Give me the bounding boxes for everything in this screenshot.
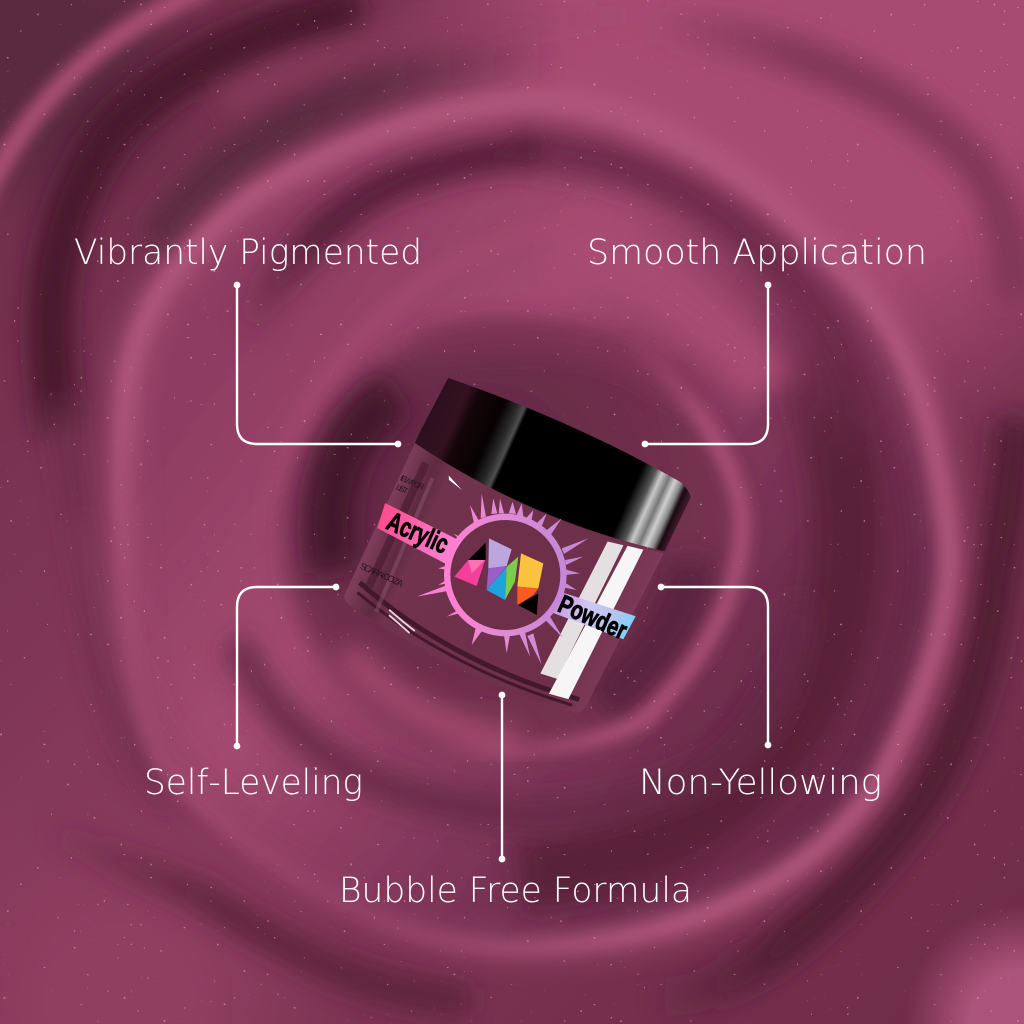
callout: Non-Yellowing [639, 584, 882, 803]
band: Acrylic [373, 503, 459, 564]
dark just inside the mid ridge [80, 148, 886, 895]
inner ridge highlight [630, 340, 742, 719]
logo: paint splash ring with coloured facets [417, 493, 588, 665]
callout: Self-Leveling: Self-Leveling [144, 763, 363, 803]
purple facet [488, 538, 512, 568]
callout: Bubble Free Formula: Bubble Free Formula [339, 871, 692, 911]
splash rays [417, 493, 588, 665]
jar body and lid: LIST [395, 483, 410, 496]
callout: Bubble Free Formula [339, 692, 692, 911]
jar body and lid: Powder [554, 589, 632, 645]
callout: Self-Leveling [144, 584, 363, 803]
jar body and lid [336, 370, 697, 727]
glass jar body [336, 442, 664, 726]
inner swirl region around jar [287, 325, 742, 762]
lid [410, 371, 697, 565]
callout: Vibrantly Pigmented [74, 233, 422, 447]
callout: Smooth Application: Smooth Application [587, 233, 927, 273]
small side text: IEW FOR [399, 474, 426, 492]
silver reflections [540, 535, 623, 683]
centre disc [450, 520, 560, 630]
product: acrylic powder jar [336, 370, 697, 727]
band: Powder [544, 581, 636, 645]
callout: Smooth Application [587, 233, 927, 447]
mid ridge highlight [121, 100, 949, 948]
jar body and lid: Acrylic [383, 506, 453, 560]
callout: Vibrantly Pigmented: Vibrantly Pigmented [74, 233, 422, 273]
jar body and lid: SCARAI.CO.ZA [359, 561, 405, 589]
blue and green facet [487, 567, 507, 600]
mid ridge soft glow [121, 100, 949, 948]
orange facet [517, 553, 543, 588]
pink facet [454, 560, 485, 586]
outer light ridge [0, 0, 210, 205]
splash ring [444, 514, 567, 636]
mid swirl region [121, 100, 949, 948]
callout: Non-Yellowing: Non-Yellowing [639, 763, 882, 803]
